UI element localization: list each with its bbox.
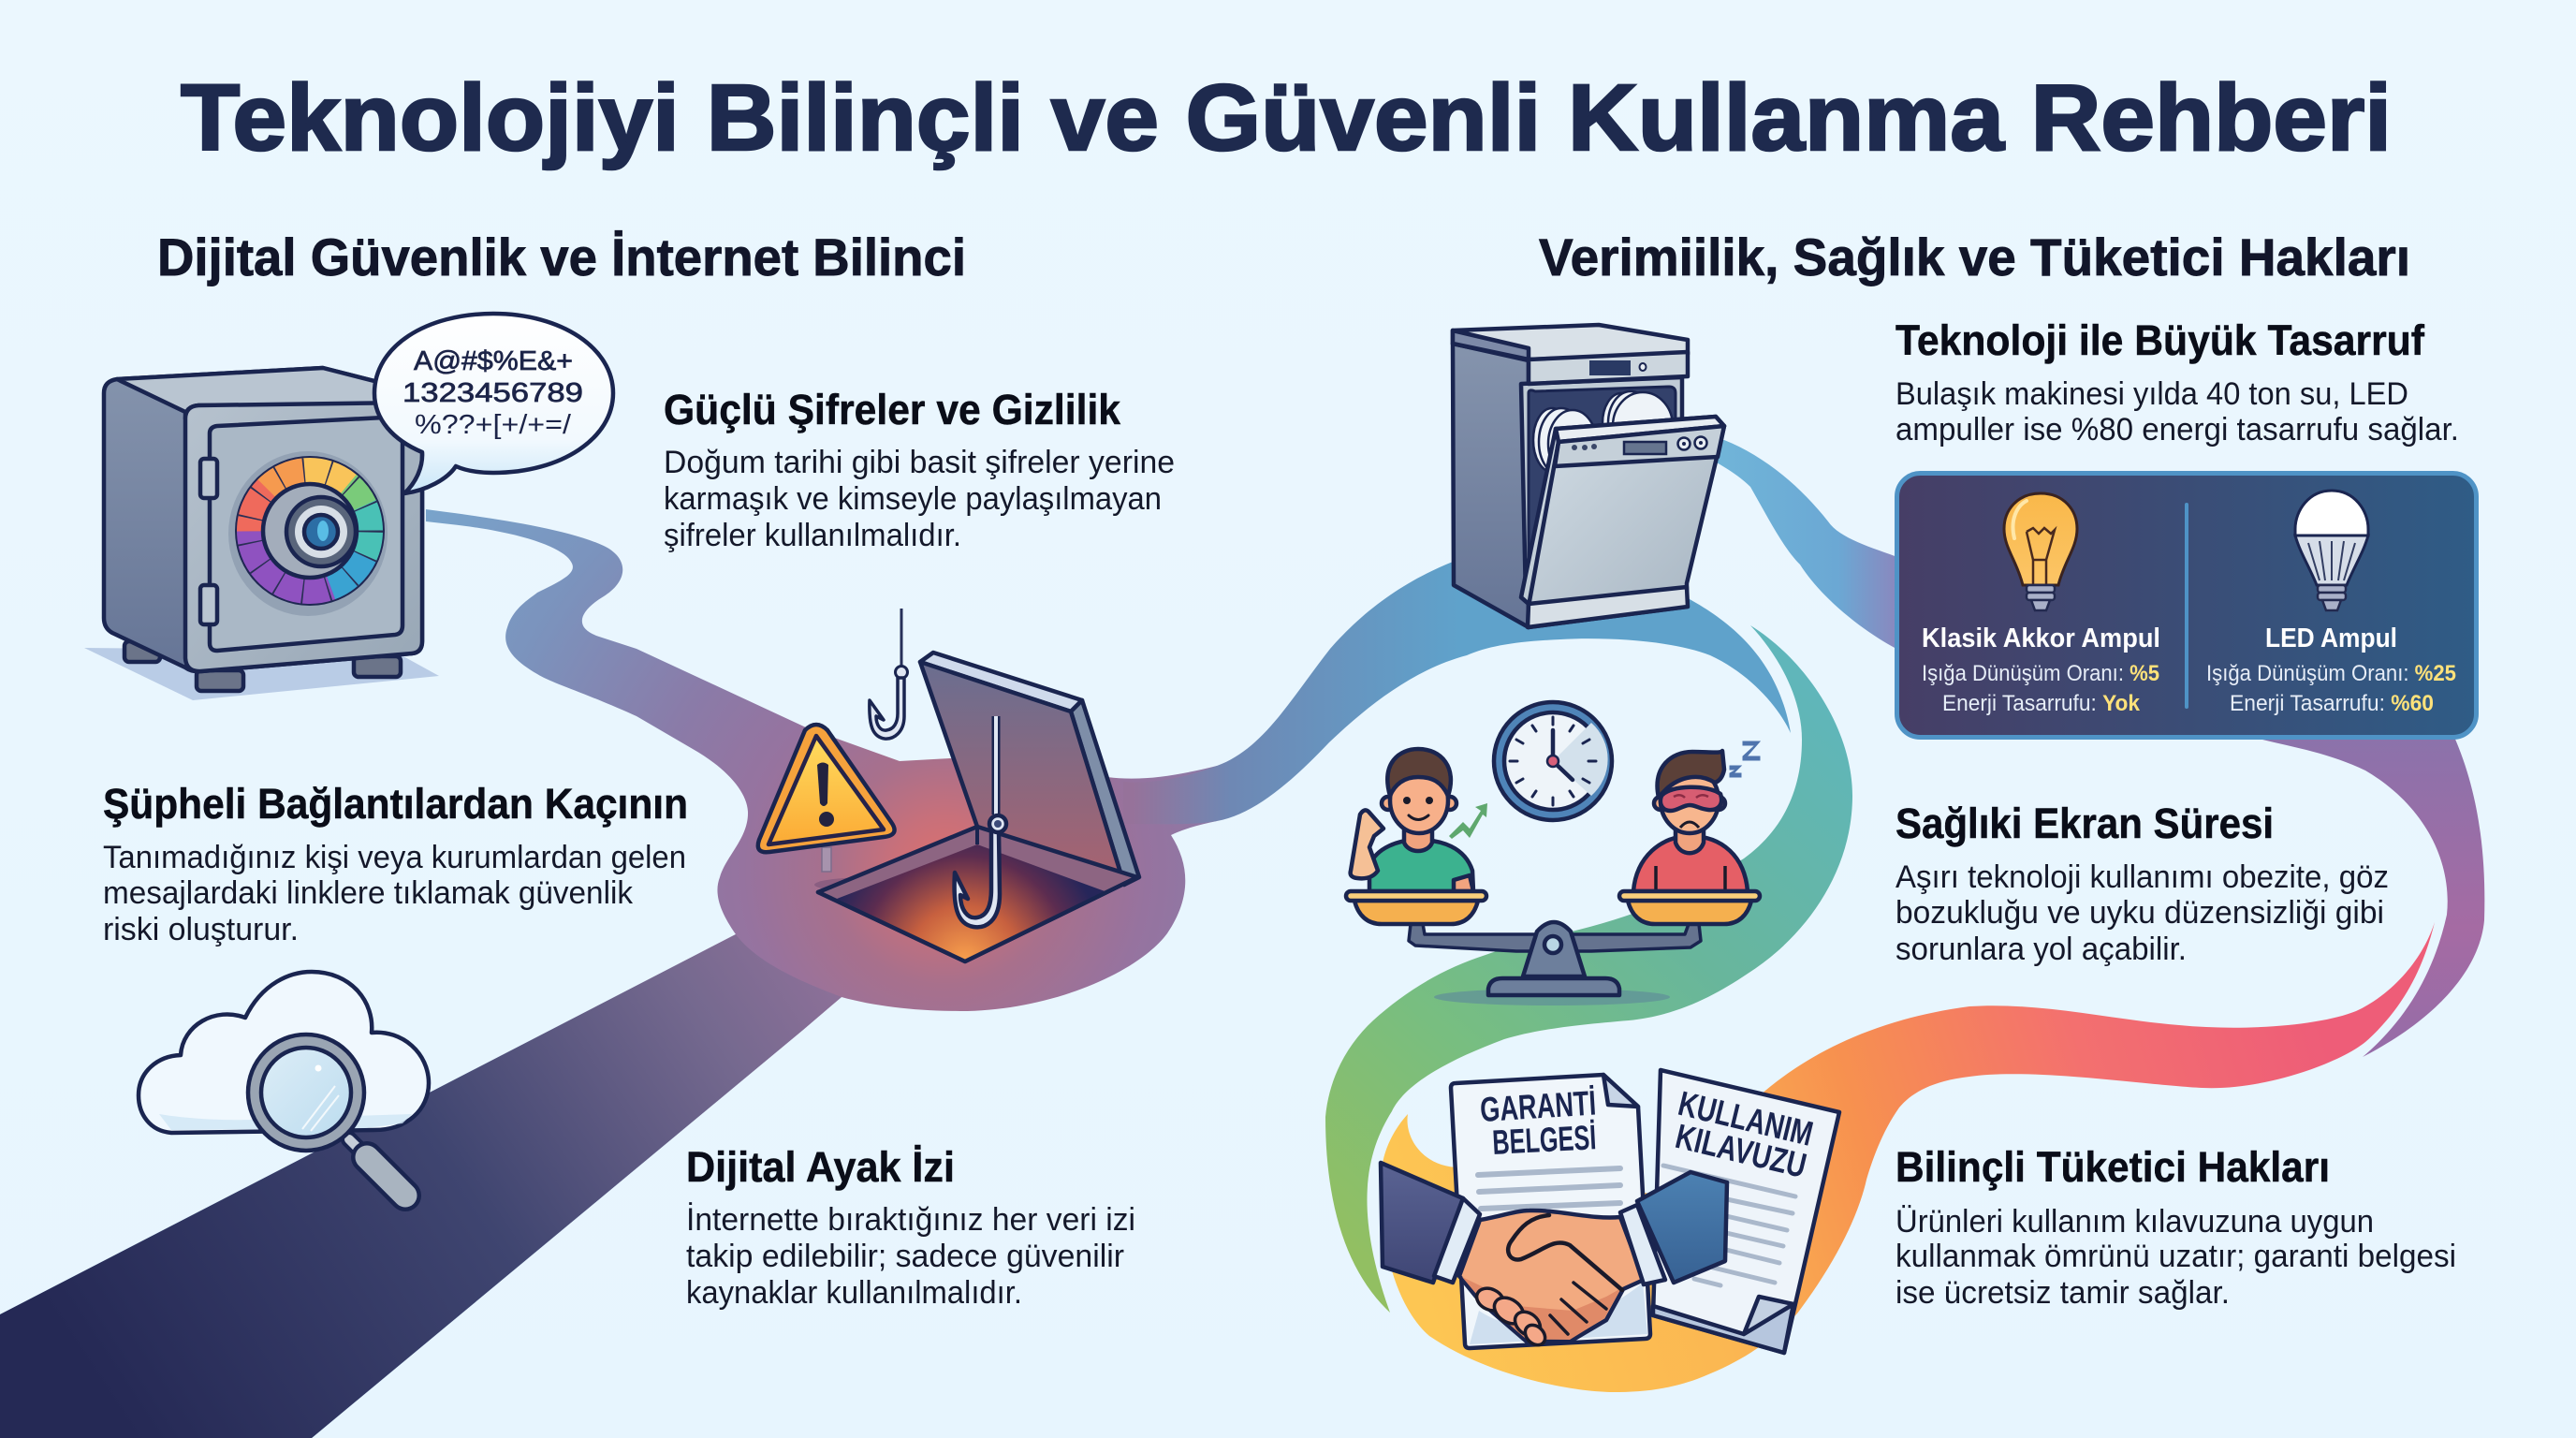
- text block: consumer rights: Bilinçli Tüketici Hakları: [1895, 1143, 2330, 1191]
- icon: dishwasher: [1453, 325, 1724, 627]
- icon: LED bulb: [2295, 491, 2368, 610]
- small hook: [870, 609, 908, 739]
- label: classic bulb: Klasik Akkor Ampul: [1922, 624, 2160, 653]
- title: Teknolojiyi Bilinçli ve Güvenli Kullanma Rehberi: [181, 66, 2392, 170]
- ribbon: dark digital path with glowing hole area: [0, 509, 1217, 1438]
- text block: healthy screen time: [1895, 800, 2389, 967]
- document: warranty certificate: BELGESİ: [1491, 1118, 1597, 1162]
- icon: incandescent bulb: [2004, 493, 2077, 610]
- panel: bulb comparison: [1896, 474, 2477, 738]
- text block: strong passwords: karmaşık ve kimseyle paylaşılmayan: [664, 481, 1162, 517]
- label: LED bulb: Işığa Dünüşüm Oranı: %25: [2206, 661, 2456, 686]
- text block: consumer rights: [1895, 1143, 2456, 1311]
- text block: digital footprint: [686, 1143, 1135, 1311]
- dial: [225, 446, 395, 616]
- handshake: [1381, 1163, 1727, 1349]
- label: LED bulb: Enerji Tasarrufu: %60: [2230, 691, 2434, 716]
- text block: healthy screen time: bozukluğu ve uyku düzensizliği gibi: [1895, 895, 2384, 931]
- document: user manual: KULLANIM: [1675, 1084, 1817, 1153]
- text block: suspicious links: Şüpheli Bağlantılardan Kaçının: [103, 780, 688, 828]
- callout: password speech bubble: [374, 314, 613, 493]
- text block: suspicious links: mesajlardaki linklere tıklamak güvenlik: [103, 875, 634, 911]
- icon: warning sign: [758, 725, 895, 872]
- text block: strong passwords: Doğum tarihi gibi basit şifreler yerine: [664, 445, 1175, 480]
- text block: healthy screen time: Aşırı teknoloji kullanımı obezite, göz: [1895, 859, 2389, 895]
- label: LED bulb: LED Ampul: [2265, 624, 2397, 653]
- icon: cloud with magnifying glass: [139, 972, 429, 1196]
- big hook: [955, 716, 1006, 927]
- scale pans: [1346, 891, 1760, 924]
- text block: digital footprint: takip edilebilir; sadece güvenilir: [686, 1239, 1124, 1274]
- text block: suspicious links: [103, 780, 688, 947]
- document: warranty certificate: [1451, 1075, 1650, 1348]
- icon: documents and handshake: [1381, 1070, 1839, 1353]
- person: rested: [1351, 749, 1487, 891]
- label: classic bulb: Işığa Dünüşüm Oranı: %5: [1922, 661, 2159, 686]
- text block: digital footprint: kaynaklar kullanılmalıdır.: [686, 1275, 1022, 1311]
- ribbon: blue band to bulb panel: [1713, 440, 1900, 651]
- callout: password speech bubble: %??+[+/+=/: [415, 410, 572, 440]
- label: classic bulb: [1922, 624, 2160, 716]
- ribbon: blue arc around dishwasher: [1123, 548, 1791, 824]
- label: LED bulb: [2206, 624, 2456, 716]
- text block: savings: [1895, 316, 2459, 448]
- text block: strong passwords: [664, 386, 1175, 553]
- text block: suspicious links: riski oluşturur.: [103, 912, 299, 947]
- text block: healthy screen time: Sağlıki Ekran Süresi: [1895, 800, 2274, 847]
- label: classic bulb: Enerji Tasarrufu: Yok: [1942, 691, 2141, 716]
- icon: safe with colorful dial: [84, 368, 439, 700]
- heading: right section: Verimiilik, Sağlık ve Tüketici Hakları: [1539, 227, 2410, 286]
- ribbon: purple band below panel: [2262, 735, 2484, 1057]
- text block: digital footprint: Dijital Ayak İzi: [686, 1143, 955, 1191]
- text block: digital footprint: İnternette bıraktığınız her veri izi: [686, 1202, 1135, 1238]
- document: user manual: KILAVUZU: [1672, 1117, 1810, 1185]
- heading: left section: Dijital Güvenlik ve İnternet Bilinci: [157, 227, 966, 286]
- person: tired with sleep mask: [1633, 741, 1760, 891]
- callout: password speech bubble: A@#$%E&+: [414, 346, 573, 376]
- document: user manual: [1653, 1070, 1839, 1353]
- text block: savings: Teknoloji ile Büyük Tasarruf: [1895, 316, 2425, 364]
- text block: savings: ampuller ise %80 energi tasarrufu sağlar.: [1895, 412, 2459, 448]
- ribbon: yellow to pink swirl: [1382, 922, 2435, 1392]
- icon: balance scale with two people and clock: [1346, 702, 1760, 1005]
- text block: consumer rights: kullanmak ömrünü uzatır; garanti belgesi: [1895, 1239, 2456, 1274]
- callout: password speech bubble: 1323456789: [402, 378, 583, 408]
- ribbon: teal to green swirl: [1325, 625, 1852, 1313]
- document: warranty certificate: GARANTİ: [1479, 1083, 1597, 1129]
- clock: [1494, 702, 1612, 820]
- text block: strong passwords: şifreler kullanılmalıdır.: [664, 518, 961, 553]
- scale beam: [1409, 922, 1701, 995]
- text block: consumer rights: Ürünleri kullanım kılavuzuna uygun: [1895, 1204, 2374, 1240]
- text block: savings: Bulaşık makinesi yılda 40 ton su, LED: [1895, 376, 2408, 412]
- text block: strong passwords: Güçlü Şifreler ve Gizlilik: [664, 386, 1121, 433]
- text block: suspicious links: Tanımadığınız kişi veya kurumlardan gelen: [103, 840, 686, 875]
- text block: healthy screen time: sorunlara yol açabilir.: [1895, 932, 2187, 967]
- text block: consumer rights: ise ücretsiz tamir sağlar.: [1895, 1275, 2230, 1311]
- icon: trapdoor with phishing hook: [758, 609, 1139, 961]
